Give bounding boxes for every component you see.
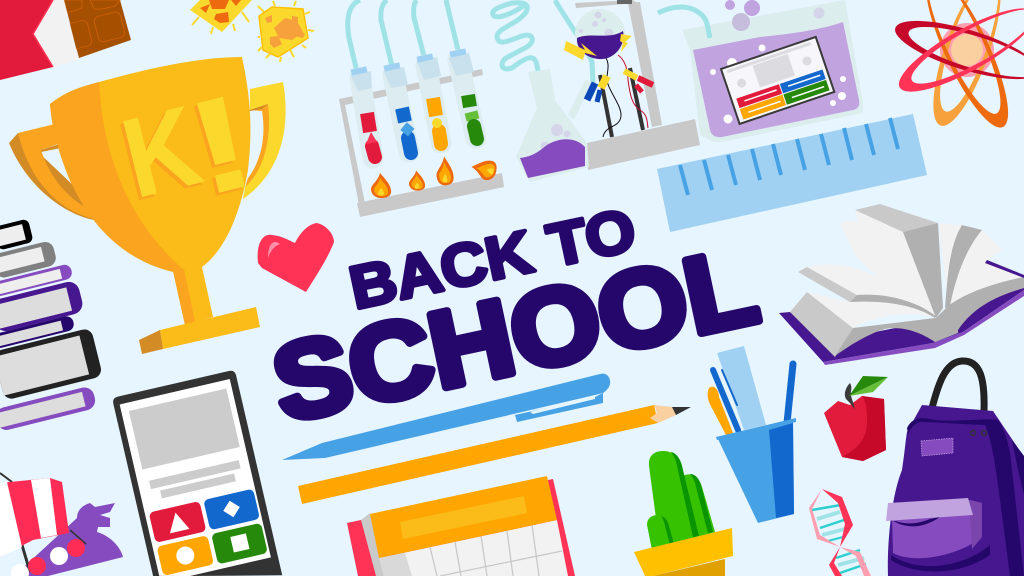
cactus pot [634, 528, 733, 576]
atom orbit red light [889, 0, 1024, 106]
K! logo [109, 64, 270, 228]
tall blue pen [787, 364, 793, 423]
book grey [0, 240, 58, 279]
trophy right handle [243, 82, 286, 199]
calendar header [370, 476, 557, 558]
connector hose and coil [493, 2, 593, 86]
stand base and post [575, 0, 700, 170]
backpack handle [932, 361, 984, 411]
apple leaf [849, 376, 888, 396]
title: Back to School [263, 196, 767, 444]
orange spoon in cup [708, 387, 733, 435]
icon: pen [282, 374, 610, 460]
atom orbit orange dark [911, 0, 1023, 136]
cactus right arm [680, 474, 715, 538]
K! logo: ! [173, 64, 270, 225]
phone answer blue [203, 489, 260, 530]
book purple bottom [0, 385, 97, 432]
atom orbit orange light [920, 0, 1014, 133]
round flask [575, 9, 625, 59]
icon: ruler [657, 114, 927, 232]
icon: pencil [298, 405, 691, 504]
rack frame [339, 69, 504, 217]
icon: trophy with K! [9, 57, 286, 354]
icon: viking ship [0, 473, 123, 576]
ship hull [14, 503, 123, 576]
K! logo: K [109, 87, 208, 225]
trophy left handle [9, 124, 116, 222]
phone question image [129, 389, 240, 470]
tube orange [417, 53, 442, 144]
calendar grid [379, 520, 568, 576]
icon: calendar [347, 476, 575, 576]
backpack patch [921, 438, 953, 456]
book black large [0, 328, 103, 400]
electrodes and wires [587, 55, 653, 137]
backpack body [888, 405, 1024, 576]
icon: pen cup [708, 346, 796, 523]
phone text lines [149, 460, 243, 500]
teal hoses [348, 0, 458, 72]
cactus main stem [649, 451, 698, 548]
book dark indigo [0, 315, 75, 349]
trophy stem [173, 267, 213, 325]
icon: backpack [886, 361, 1024, 576]
icon: atom [889, 0, 1024, 136]
light ruler in cup [717, 346, 766, 430]
icon: chocolate bar [0, 0, 131, 80]
K! logo: K [112, 84, 211, 222]
tube blue [384, 62, 414, 153]
tube red [351, 66, 377, 158]
icon: stack of books [0, 219, 103, 432]
cactus left arm [647, 515, 674, 550]
tube green [449, 48, 477, 139]
book deep purple [0, 280, 85, 333]
left turning page [798, 264, 936, 318]
burner flames [371, 156, 499, 198]
atom orbit red dark [889, 9, 1024, 91]
icon: distillation stand [493, 0, 700, 182]
book black [0, 219, 34, 251]
title line: SCHOOL: SCHOOL [263, 224, 767, 444]
beaker liquid [693, 22, 859, 137]
calendar back cover [347, 479, 575, 576]
cup body [716, 418, 796, 523]
quiz screen [721, 37, 834, 124]
icon: cactus in pot [634, 451, 733, 576]
icon: phone with quiz [112, 370, 282, 576]
icon: heart [258, 223, 334, 292]
standing pages [840, 210, 936, 316]
K! logo: ! [170, 67, 267, 228]
trophy base [139, 307, 260, 354]
bubbles [710, 0, 846, 124]
top cover corner [985, 260, 1024, 278]
phone answer orange [157, 535, 214, 576]
icon: open book [779, 204, 1024, 365]
beaker hose [658, 7, 710, 38]
icon: golden gem right [258, 1, 314, 62]
icon: golden gem left [190, 0, 252, 34]
ship sail [0, 478, 69, 557]
phone answer green [211, 523, 268, 564]
icon: apple [824, 376, 888, 461]
icon: DNA helix [809, 489, 871, 576]
right page block [935, 277, 1024, 342]
backpack pocket [886, 498, 990, 571]
left page block [790, 292, 853, 357]
beaker glass [682, 0, 863, 142]
phone answer red [149, 501, 206, 543]
right pages [939, 223, 1024, 306]
ship shields [11, 539, 85, 576]
lightning bolts [564, 34, 632, 60]
lower flask [516, 69, 592, 182]
trophy cup [50, 57, 250, 272]
title line: BACK TO: BACK TO [344, 196, 641, 322]
icon: test tube rack with burners [339, 0, 504, 217]
book light purple [0, 263, 73, 297]
calendar page stack [361, 513, 391, 576]
book cover [779, 275, 1024, 365]
backpack zippers [938, 430, 986, 524]
icon: beaker with quiz screen [658, 0, 863, 142]
blue pen in cup [713, 370, 738, 430]
